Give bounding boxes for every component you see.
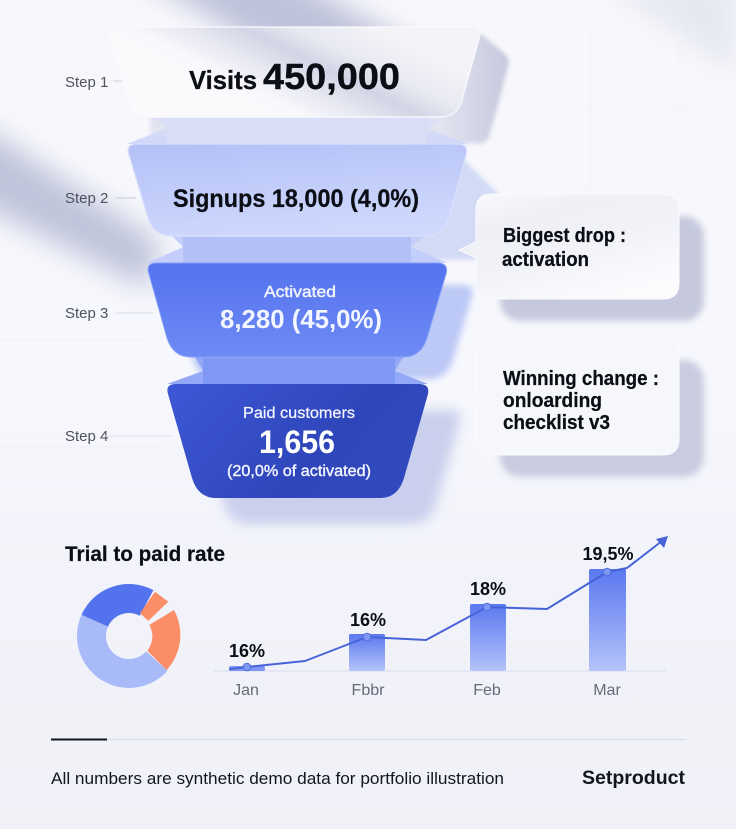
step 1 label: Step 1 <box>65 74 108 91</box>
callout: biggest drop <box>459 194 704 321</box>
funnel stage 1: visits: Visits <box>189 65 257 95</box>
data points <box>243 568 611 671</box>
funnel stage 4: paid customers: (20,0% of activated) <box>227 463 371 480</box>
funnel stage 4: paid customers <box>167 384 428 498</box>
donut chart <box>77 584 180 688</box>
month labels: Mar <box>593 682 621 699</box>
step 4 label <box>65 428 172 445</box>
callout: winning change <box>458 339 704 477</box>
step 3 label <box>65 305 153 322</box>
trend line <box>230 541 662 669</box>
arrow head <box>656 536 668 548</box>
funnel connectors <box>127 117 467 384</box>
funnel stage 2: signups <box>128 144 467 236</box>
value labels: 16% <box>350 610 386 630</box>
step 2 label <box>65 190 136 207</box>
funnel stage 4: paid customers: 1,656 <box>259 424 335 460</box>
funnel stage 3: activated: 8,280 (45,0%) <box>220 304 382 334</box>
step 4 label: Step 4 <box>65 428 108 445</box>
bars <box>229 569 626 671</box>
funnel stage 1: visits <box>109 27 480 117</box>
footer note: All numbers are synthetic demo data for portfolio illustration <box>51 769 504 788</box>
callout: winning change: checklist v3 <box>503 411 610 434</box>
funnel shadows <box>150 30 508 524</box>
month labels: Fbbr <box>352 682 385 699</box>
funnel stage 2: signups: Signups 18,000 (4,0%) <box>173 185 419 213</box>
funnel stage 1: visits: 450,000 <box>263 56 400 97</box>
callout: winning change: Winning change : <box>503 367 659 390</box>
section title: Trial to paid rate <box>65 543 225 566</box>
callout: winning change: onloarding <box>503 389 602 412</box>
value labels <box>229 544 634 661</box>
footer divider <box>51 738 685 740</box>
value labels: 16% <box>229 641 265 661</box>
step 3 label: Step 3 <box>65 305 108 322</box>
funnel stage 4: paid customers: Paid customers <box>243 405 355 422</box>
trend bar and line chart <box>214 536 668 699</box>
month labels: Jan <box>233 682 259 699</box>
value labels: 18% <box>470 579 506 599</box>
funnel <box>109 27 508 524</box>
month labels <box>233 682 621 699</box>
value labels: 19,5% <box>582 544 634 564</box>
month labels: Feb <box>473 682 501 699</box>
brand name: Setproduct <box>582 768 686 789</box>
funnel stage 3: activated: Activated <box>264 284 336 301</box>
funnel stage 3: activated <box>148 263 447 357</box>
step 2 label: Step 2 <box>65 190 108 207</box>
callout: biggest drop: activation <box>502 248 589 271</box>
step labels <box>65 74 172 445</box>
callout: biggest drop: Biggest drop : <box>503 224 626 247</box>
